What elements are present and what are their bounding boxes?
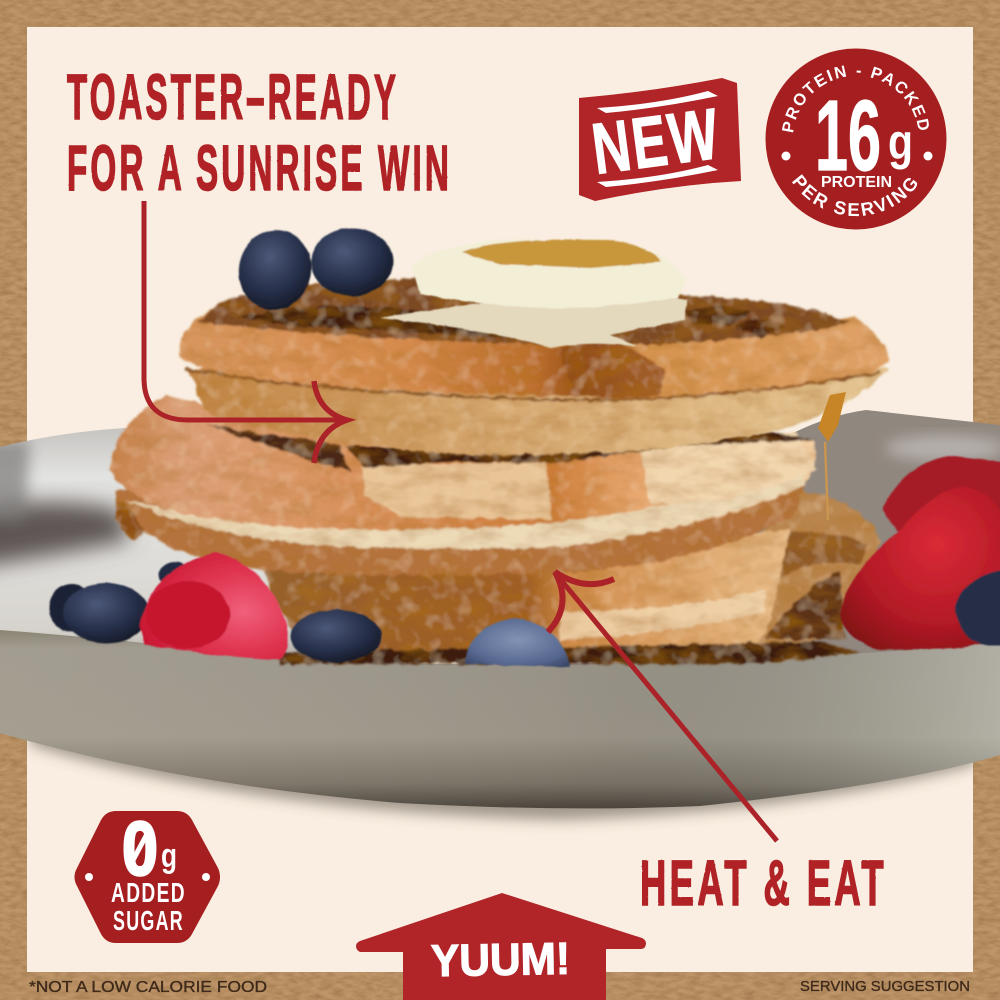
syrup stream xyxy=(818,392,846,442)
badge: new xyxy=(579,78,741,201)
plate top edge shade xyxy=(0,440,30,520)
headline: toaster-ready xyxy=(67,61,452,204)
new wordmark: NEW xyxy=(588,94,725,190)
pale blocks xyxy=(362,462,552,520)
arrow: headline to top waffle xyxy=(144,201,347,463)
dark syrup front xyxy=(560,339,665,398)
blueberry far left xyxy=(49,584,95,632)
plate surface xyxy=(0,420,410,670)
syrup pool xyxy=(235,306,550,342)
footnote left: *NOT A LOW CALORIE FOOD xyxy=(29,979,267,996)
arrow: heat and eat to bottom waffle xyxy=(548,572,777,841)
yuum text: YUUM! xyxy=(431,933,570,986)
plate back left xyxy=(0,420,410,670)
right chunk xyxy=(740,490,880,650)
zero: 0 xyxy=(122,807,158,892)
plate rim tone xyxy=(0,630,1000,808)
dot left xyxy=(85,873,93,881)
sugar: SUGAR xyxy=(113,905,184,936)
chunk shadow xyxy=(765,570,845,640)
upper band xyxy=(110,395,816,548)
shadow at base xyxy=(280,642,860,664)
arrow head xyxy=(548,572,614,632)
waffle pit far right xyxy=(735,319,785,338)
hexagon xyxy=(74,811,220,943)
protein label: PROTEIN xyxy=(821,174,892,191)
badge: 0g added sugar xyxy=(74,807,220,943)
pale block right xyxy=(640,432,818,505)
top face xyxy=(198,278,852,345)
plate shadow xyxy=(27,740,973,829)
upper stripe xyxy=(597,91,718,113)
raspberry right front xyxy=(840,487,1000,650)
lower layer xyxy=(116,485,805,576)
blueberry hidden xyxy=(159,562,191,588)
line two: FOR A SUNRISE WIN xyxy=(67,132,452,204)
pale rim xyxy=(560,590,765,640)
added: ADDED xyxy=(111,877,186,908)
plate front rim xyxy=(0,630,1000,808)
g: g xyxy=(161,837,177,875)
blueberry centre xyxy=(465,618,570,667)
line one: TOASTER–READY xyxy=(67,61,399,133)
16: 16 xyxy=(815,80,881,192)
waffle body xyxy=(265,530,790,664)
syrup thread xyxy=(825,442,828,520)
top shadow strip xyxy=(345,432,815,468)
blueberry left xyxy=(63,583,149,643)
syrup drip xyxy=(818,392,846,520)
pale lower band xyxy=(188,368,888,455)
bottom waffle xyxy=(265,490,880,664)
rim line xyxy=(185,368,880,400)
dot right xyxy=(202,873,210,881)
raspberry right back xyxy=(882,456,1000,535)
arrow shaft xyxy=(144,201,345,420)
dot right xyxy=(924,152,932,160)
blueberry right xyxy=(955,570,1000,645)
arrow shaft xyxy=(556,574,777,841)
footnote right: SERVING SUGGESTION xyxy=(800,978,970,995)
yuum house arrow xyxy=(356,893,646,1000)
upper band xyxy=(179,298,889,398)
badge: 16g protein xyxy=(766,48,946,230)
arrow shape xyxy=(356,893,646,1000)
raspberry hollow xyxy=(146,581,230,649)
top waffle xyxy=(179,278,889,455)
arrow head xyxy=(314,381,347,463)
plate highlight right xyxy=(885,435,1000,461)
flag xyxy=(579,78,741,201)
blueberry centre left xyxy=(290,610,382,662)
g: g xyxy=(888,114,913,170)
blueberries and raspberries xyxy=(49,223,1000,667)
maple on butter xyxy=(462,240,662,268)
plate inner shadow xyxy=(0,502,130,568)
syrup left edge xyxy=(116,500,145,542)
waffle pit right xyxy=(682,306,750,324)
plate back right xyxy=(700,410,1000,670)
raspberry left xyxy=(140,552,288,660)
pale rim xyxy=(125,468,805,549)
butter pat xyxy=(380,240,688,348)
curved text top: PROTEIN - PACKED xyxy=(782,66,929,132)
lower stripe xyxy=(597,165,718,187)
blueberry top right xyxy=(311,228,393,296)
shadow gap xyxy=(205,425,350,472)
zero slash xyxy=(131,832,148,864)
dot left xyxy=(782,152,790,160)
photo: plate with waffles and berries xyxy=(0,223,1000,808)
blueberry top left xyxy=(231,223,319,317)
melted butter xyxy=(380,294,688,348)
butter block xyxy=(412,240,686,308)
curved text bottom: PER SERVING xyxy=(792,174,918,216)
chunk highlight xyxy=(768,532,868,585)
circle xyxy=(766,48,946,230)
middle waffle xyxy=(110,395,818,576)
